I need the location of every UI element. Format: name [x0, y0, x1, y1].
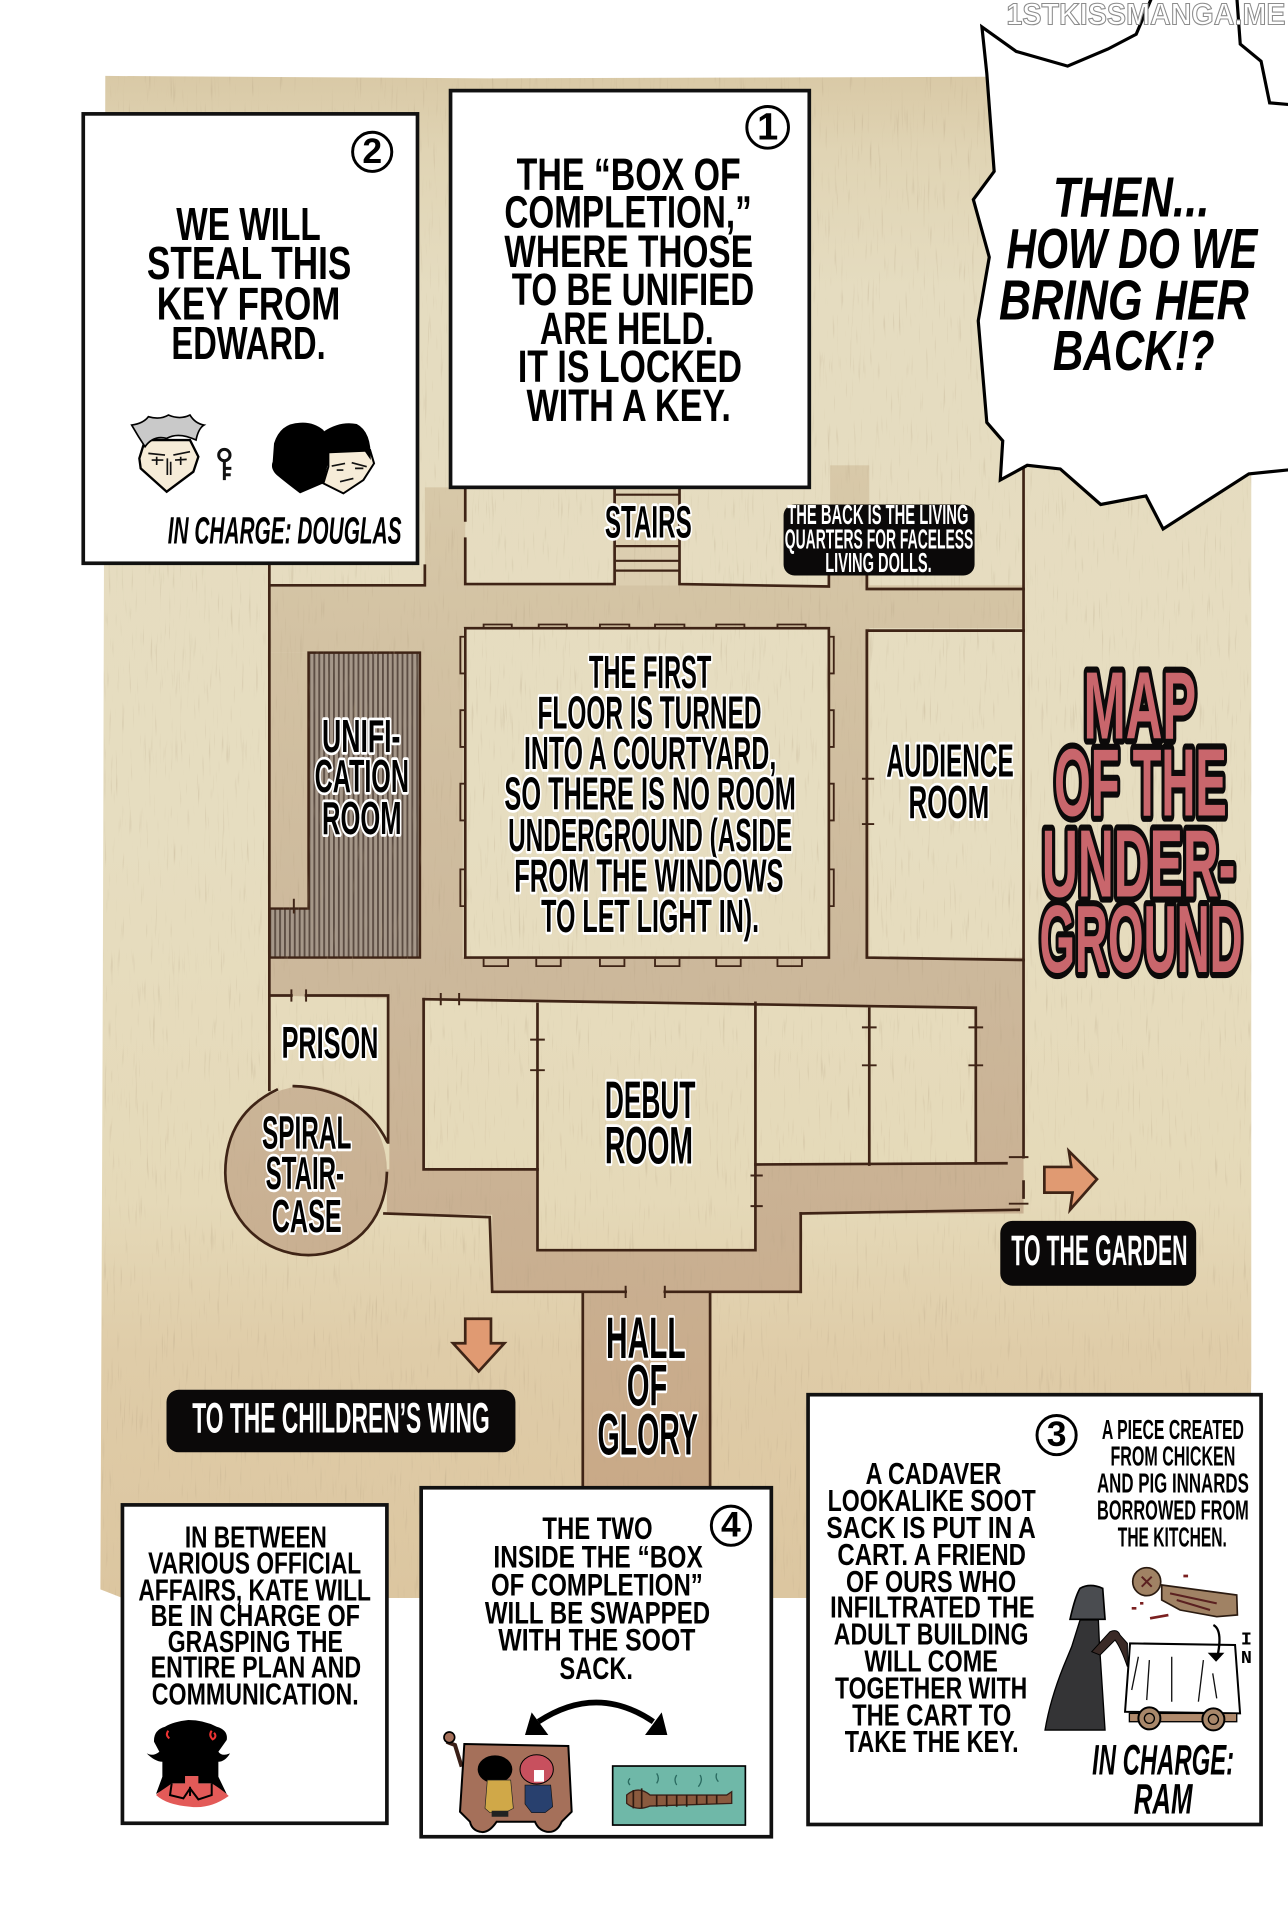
walls	[225, 465, 1028, 1488]
callout: living quarters: THE BACK IS THE LIVING	[787, 499, 968, 530]
map parchment	[100, 76, 1251, 1598]
panel 3 main text: LOOKALIKE SOOT	[828, 1484, 1036, 1518]
label: courtyard note: FROM THE WINDOWS	[514, 849, 784, 901]
panel 4 text: INSIDE THE “BOX	[493, 1538, 703, 1574]
stair treads	[616, 495, 680, 571]
label: in	[1241, 1629, 1252, 1669]
label: spiral staircase	[262, 1107, 351, 1242]
label: unification room: UNIFI-	[322, 710, 400, 762]
label: spiral staircase: CASE	[272, 1190, 342, 1242]
in charge: ram: RAM	[1134, 1775, 1193, 1823]
panel 1 text: THE “BOX OF	[517, 149, 741, 200]
label: hall of glory: OF	[627, 1354, 667, 1419]
panel 1 text: WHERE THOSE	[504, 226, 753, 277]
panel text: BE IN CHARGE OF	[151, 1599, 360, 1633]
number 3: 3	[1047, 1414, 1066, 1454]
cadaver	[1132, 1568, 1237, 1618]
label: courtyard note: THE FIRST	[589, 646, 711, 698]
in charge: ram	[1092, 1736, 1234, 1823]
panel text	[138, 1521, 371, 1711]
arrow: to the children's wing	[453, 1319, 504, 1371]
door ticks	[269, 779, 1028, 1298]
arrow: to the garden	[1044, 1151, 1097, 1210]
panel 2 text: STEAL THIS	[147, 237, 351, 289]
panel text: AFFAIRS, KATE WILL	[138, 1573, 371, 1607]
corridors	[225, 465, 1024, 1491]
map labels: DEBUT	[605, 1071, 695, 1130]
title	[1039, 653, 1243, 993]
label: audience room: ROOM	[908, 776, 989, 828]
panel 4 text: THE TWO	[542, 1510, 653, 1546]
label: debut room: ROOM	[605, 1116, 693, 1175]
label: courtyard note: SO THERE IS NO ROOM	[504, 767, 796, 819]
panel 3: cart and cadaver	[808, 1395, 1261, 1824]
panel 4 text: SACK.	[560, 1650, 633, 1686]
panel 1: box of completion	[451, 91, 809, 487]
number 4	[711, 1505, 751, 1545]
panel 4 text	[485, 1510, 710, 1686]
double-headed arrow	[525, 1703, 667, 1735]
panel 2 text	[147, 198, 351, 369]
label: courtyard note	[504, 646, 796, 942]
label: audience room: AUDIENCE	[886, 734, 1014, 786]
callout: to the garden	[1000, 1221, 1196, 1286]
label: courtyard note: FLOOR IS TURNED	[537, 687, 762, 739]
label: courtyard note: INTO A COURTYARD,	[524, 727, 776, 779]
panel 3 main text: INFILTRATED THE	[830, 1591, 1035, 1625]
panel 3 main text	[826, 1457, 1036, 1759]
callout: to the children's wing	[167, 1390, 515, 1452]
map labels	[262, 497, 1014, 1468]
label: courtyard note: UNDERGROUND (ASIDE	[508, 809, 792, 861]
label: prison: PRISON	[282, 1019, 378, 1068]
panel 1 text: COMPLETION,”	[504, 187, 752, 238]
label: in: N	[1241, 1648, 1252, 1669]
panel 3 main text: CART. A FRIEND	[837, 1538, 1026, 1572]
bubble text: THEN...	[1053, 166, 1210, 229]
icon: kate's silhouette and douglas	[272, 423, 374, 493]
panel 2: steal the key	[83, 114, 417, 563]
panel 3 main text: A CADAVER	[866, 1457, 1002, 1491]
panel 3 main text: OF OURS WHO	[846, 1565, 1016, 1599]
spiral staircase wall	[225, 1086, 387, 1255]
panel 2 text: WE WILL	[176, 198, 321, 250]
number 2: 2	[362, 131, 382, 171]
label: courtyard note: TO LET LIGHT IN).	[541, 890, 759, 942]
woman in black	[1045, 1586, 1127, 1730]
panel: kate in charge	[122, 1505, 387, 1823]
bubble text	[999, 166, 1258, 382]
icon: kate silhouette	[147, 1720, 230, 1807]
number 3	[1037, 1414, 1076, 1455]
panel 3 main text: WILL COME	[864, 1644, 998, 1678]
label: unification room: ROOM	[322, 792, 402, 844]
label: unification room: CATION	[315, 750, 409, 802]
illustration: swap	[444, 1703, 745, 1832]
callout: to the children's wing: TO THE CHILDREN’S WING	[192, 1395, 490, 1443]
panel 1 text: IT IS LOCKED	[518, 341, 742, 392]
text: QUARTERS FOR FACELESS	[785, 524, 973, 555]
label: spiral staircase: SPIRAL	[262, 1107, 351, 1159]
bubble text: BACK!?	[1053, 319, 1215, 382]
panel 1 text	[504, 149, 754, 431]
label: debut room	[605, 1071, 695, 1175]
label: spiral staircase: STAIR-	[266, 1147, 344, 1199]
panel text: GRASPING THE	[168, 1625, 343, 1659]
illustration: woman pushing cart with cadaver	[1045, 1568, 1240, 1730]
cart	[1125, 1643, 1240, 1730]
number 2	[353, 131, 392, 171]
label: unification room	[315, 710, 409, 844]
panel 1 text: TO BE UNIFIED	[512, 264, 754, 315]
soot sack	[613, 1766, 745, 1825]
number 1	[747, 107, 788, 149]
label: hall of glory	[597, 1306, 698, 1468]
panel 2 text: EDWARD.	[171, 317, 326, 369]
arrow: into cart	[1208, 1625, 1224, 1662]
panel text: VARIOUS OFFICIAL	[148, 1546, 361, 1580]
panel 3 main text: TOGETHER WITH	[835, 1671, 1027, 1705]
panel 3 note	[1097, 1414, 1249, 1553]
panel text: IN BETWEEN	[185, 1521, 327, 1555]
map labels: GLORY	[597, 1403, 698, 1468]
icon: edward's face	[132, 415, 204, 492]
cart with two girls	[444, 1732, 572, 1832]
number 1: 1	[757, 107, 778, 149]
panel 1 text: WITH A KEY.	[526, 380, 731, 431]
windows	[460, 624, 834, 966]
number 4: 4	[721, 1505, 741, 1545]
panel text: COMMUNICATION.	[152, 1677, 359, 1711]
panel 3 main text: THE CART TO	[852, 1698, 1011, 1732]
panel 4 text: WILL BE SWAPPED	[485, 1595, 710, 1631]
panel 4 text: WITH THE SOOT	[498, 1622, 696, 1658]
in charge: douglas: IN CHARGE: DOUGLAS	[168, 511, 402, 553]
label: in: I	[1241, 1629, 1252, 1650]
panel 3 main text: ADULT BUILDING	[834, 1617, 1028, 1651]
speech bubble	[973, 0, 1288, 529]
panel 1 text: ARE HELD.	[540, 303, 714, 354]
panel 3 main text: SACK IS PUT IN A	[826, 1511, 1036, 1545]
callout: living quarters	[784, 499, 975, 578]
label: stairs: STAIRS	[605, 497, 692, 548]
paper grain	[100, 76, 1251, 1598]
panel text: ENTIRE PLAN AND	[151, 1651, 361, 1685]
panel 4: swap	[421, 1488, 771, 1837]
floor plan: corridors and rooms	[100, 76, 1251, 1598]
label: audience room	[886, 734, 1014, 828]
panel 3 main text: TAKE THE KEY.	[845, 1725, 1019, 1759]
unification room hatching	[269, 653, 420, 958]
panel 4 text: OF COMPLETION”	[491, 1567, 703, 1603]
callout: living quarters: LIVING DOLLS.	[825, 547, 932, 578]
label: hall of glory: HALL	[606, 1306, 686, 1371]
panel 2 text: KEY FROM	[157, 278, 340, 330]
icon: key	[219, 449, 231, 480]
